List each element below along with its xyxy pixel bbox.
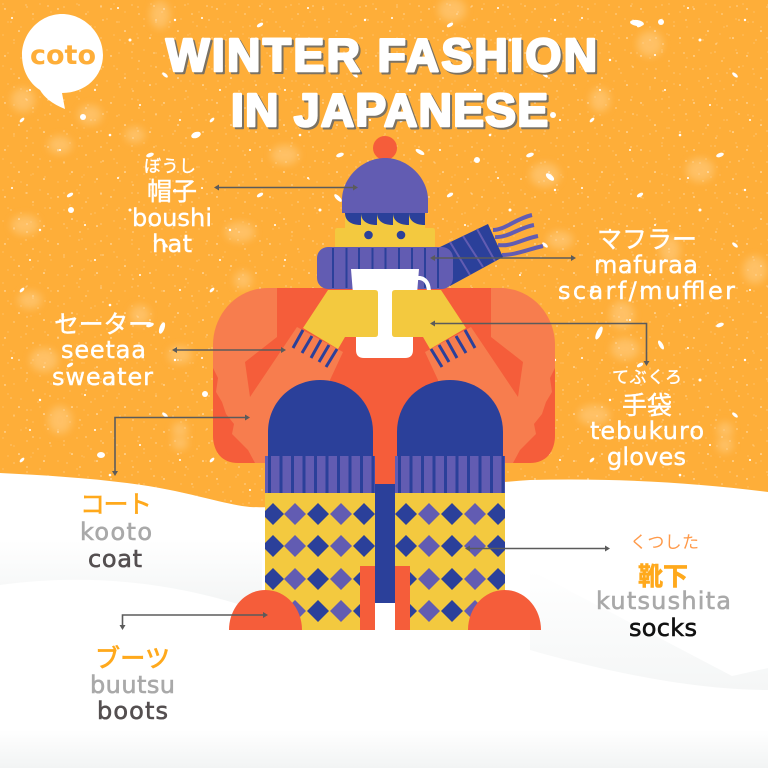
label: scarf: scarf/muffler (558, 277, 735, 305)
label: sweater (52, 310, 153, 391)
scarf (317, 215, 543, 289)
arrow: scarf (430, 255, 576, 261)
label: scarf: mafuraa (594, 251, 698, 279)
label: hat (132, 157, 212, 258)
label: hat: boushi (132, 204, 212, 232)
gloves (303, 290, 466, 349)
label: boots: ブーツ (95, 644, 170, 673)
label: gloves (590, 368, 704, 471)
arrow: hat (214, 184, 358, 190)
logo: coto speech bubble (22, 14, 103, 109)
label: boots: buutsu (90, 671, 175, 699)
label: socks: kutsushita (596, 587, 731, 615)
sweater cuffs (293, 330, 475, 367)
title: IN JAPANESE (231, 84, 548, 136)
label: sweater: sweater (52, 363, 153, 391)
face (335, 213, 435, 252)
title: IN JAPANESE (233, 86, 550, 138)
label: coat (80, 490, 152, 573)
knees (268, 380, 503, 456)
label: coat: kooto (80, 518, 152, 546)
label: socks: くつした (630, 533, 699, 553)
label: gloves: tebukuro (590, 417, 704, 445)
coat body and sleeves (213, 288, 555, 490)
label: socks: socks (629, 614, 697, 642)
label: gloves: 手袋 (622, 391, 672, 420)
boots (229, 590, 541, 630)
arrow: sweater (172, 347, 286, 353)
title (166, 29, 599, 138)
title: WINTER FASHION (166, 29, 597, 81)
label: scarf: マフラー (597, 225, 697, 254)
label: hat: 帽子 (147, 177, 197, 206)
arrow: boots (120, 612, 268, 630)
figure: person in winter clothes (213, 136, 555, 630)
label: gloves: てぶくろ (612, 368, 682, 388)
label: gloves: gloves (607, 443, 686, 471)
arrow: gloves (430, 320, 650, 366)
snow ground (0, 473, 768, 768)
title: WINTER FASHION (168, 31, 599, 83)
coffee cup (351, 269, 429, 358)
label: hat: hat (152, 230, 192, 258)
label: sweater: seetaa (61, 336, 146, 364)
hat (342, 136, 428, 213)
label: coat: coat (88, 545, 142, 573)
label: scarf (558, 225, 735, 305)
label: coat: コート (80, 490, 152, 519)
label: sweater: セーター (54, 310, 153, 339)
label: boots (90, 644, 175, 725)
label: hat: ぼうし (144, 157, 196, 177)
arrow: coat (112, 414, 250, 476)
arrow: socks (465, 546, 610, 552)
label: socks: 靴下 (638, 562, 688, 591)
label: socks (596, 533, 731, 642)
logo: coto speech bubble: coto (30, 40, 96, 71)
socks with diamond pattern (262, 456, 509, 630)
label: boots: boots (97, 697, 168, 725)
